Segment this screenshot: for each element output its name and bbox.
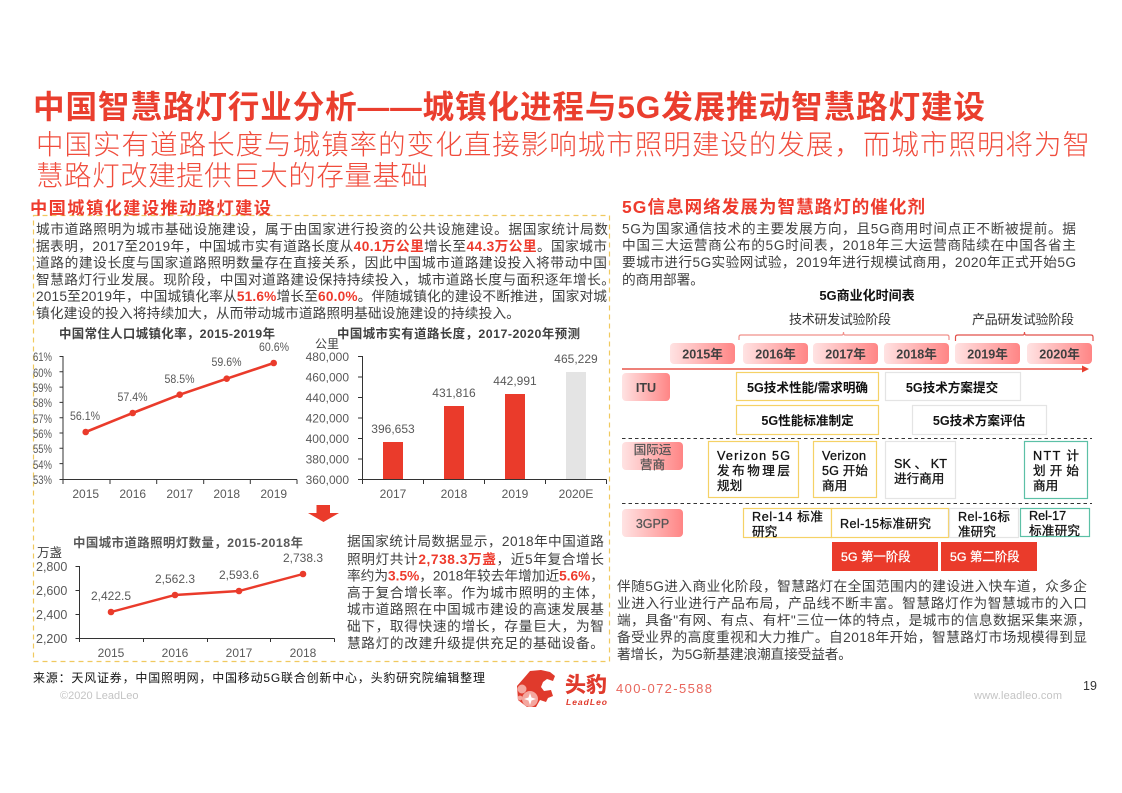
y labels: urbanization: 57%: [33, 412, 52, 426]
text block: street light commentary: [347, 533, 604, 651]
text block: street light commentary: 据国家统计局数据显示，2018年中国道路: [347, 533, 604, 549]
x labels: street lights: 2017: [226, 646, 253, 660]
x labels: street lights: 2018: [290, 646, 317, 660]
text block: 5G intro: 5G为国家通信技术的主要发展方向，且5G商用时间点正不断被提前。据: [622, 220, 1076, 236]
axes: road length: [358, 356, 606, 484]
box: Rel-17: Rel-17: [1029, 509, 1066, 523]
bracket: product trial: [956, 332, 1093, 341]
x labels: street lights: [98, 646, 317, 660]
chart: street lights line chart: [36, 535, 334, 660]
y labels: urbanization: 56%: [33, 427, 52, 441]
row label: 3GPP: [622, 509, 683, 537]
y labels: road length: 480,000: [306, 350, 349, 364]
x labels: urbanization: 2017: [166, 487, 193, 501]
box: SK KT: [886, 442, 956, 498]
divider: [622, 502, 1092, 504]
box: Rel-14: [744, 508, 832, 539]
y labels: road length: 440,000: [306, 391, 349, 405]
y labels: road length: 420,000: [306, 412, 349, 426]
box: tech proposal: 5G技术方案提交: [906, 380, 999, 395]
box: NTT: NTT 计: [1033, 449, 1079, 463]
chart title: street lights: 中国城市道路照明灯数量，2015-2018年: [73, 535, 303, 550]
row label: 3GPP: 3GPP: [636, 517, 669, 531]
logo: LeadLeo: [517, 670, 607, 707]
box: Rel-15: [832, 508, 948, 538]
copyright: ©2020 LeadLeo: [60, 690, 138, 702]
data labels: street lights: [91, 551, 323, 603]
bars: road length: [383, 372, 586, 479]
text block: 5G commercial stage: 业进入行业进行产品布局，产品线不断丰富。智慧路灯作为智慧城市的入口: [617, 595, 1087, 611]
box: Verizon commercial: 商用: [822, 479, 847, 493]
box: 5G phase one: 5G 第一阶段: [841, 549, 911, 564]
panel: left dashed frame: [34, 216, 610, 662]
box: tech proposal: [886, 372, 1020, 400]
y labels: street lights: 2,600: [36, 584, 67, 598]
data labels: urbanization: 60.6%: [259, 340, 289, 354]
chart: road length bar chart: [306, 326, 606, 501]
source note: 来源：天风证券，中国照明网，中国移动5G联合创新中心，头豹研究院编辑整理: [33, 670, 485, 685]
unit: street lights: 万盏: [37, 545, 62, 560]
y labels: urbanization: 55%: [33, 442, 52, 456]
box: SK KT: 进行商用: [894, 472, 944, 486]
data labels: street lights: 2,593.6: [219, 568, 259, 582]
heading: right section: 5G信息网络发展为智慧路灯的催化剂: [622, 197, 925, 217]
text block: 5G intro: 的商用部署。: [622, 272, 704, 288]
box: Verizon physical layer: Verizon 5G: [717, 449, 790, 463]
data line: street lights: [108, 571, 306, 615]
text block: left intro: [36, 221, 615, 321]
x labels: urbanization: 2019: [260, 487, 287, 501]
box: NTT: [1024, 442, 1088, 498]
subtitle: 中国实有道路长度与城镇率的变化直接影响城市照明建设的发展，而城市照明将为智: [36, 129, 1090, 160]
y labels: urbanization: [33, 350, 52, 487]
x labels: street lights: 2016: [162, 646, 189, 660]
arrow: timeline: [622, 366, 1089, 372]
text block: 5G commercial stage: 备受业界的高度重视和大力推广。自2018年开始，智慧路灯市场规模得到显: [617, 629, 1087, 645]
axes: street lights: [76, 566, 334, 642]
x labels: road length: [380, 487, 593, 501]
text block: street light commentary: 础下，取得快速的增长，存量巨大，为智: [347, 618, 604, 634]
row label: ITU: ITU: [636, 381, 656, 395]
x labels: road length: 2018: [441, 487, 468, 501]
year pills: 2020年: [1039, 346, 1080, 362]
box: Verizon physical layer: 发布物理层: [717, 463, 790, 478]
box: Verizon physical layer: [708, 442, 798, 498]
text block: left intro: 智慧路灯行业发展。现阶段，中国对道路建设保持持续投入，城市道路长度与面积逐年增长。: [36, 272, 615, 288]
box: performance standard: 5G性能标准制定: [761, 413, 854, 428]
year pills: 2016年: [755, 346, 796, 362]
unit: road length: 公里: [315, 337, 339, 351]
chart title: urbanization: 中国常住人口城镇化率，2015-2019年: [59, 326, 275, 341]
box: 5G phase two: 5G 第二阶段: [950, 549, 1020, 564]
text block: 5G intro: [622, 220, 1076, 288]
box: Rel-14: 研究: [752, 525, 778, 539]
x labels: urbanization: 2018: [213, 487, 240, 501]
y labels: road length: 380,000: [306, 452, 349, 466]
x labels: road length: 2020E: [559, 487, 593, 501]
text block: left intro: 2015至2019年，中国城镇化率从51.6%增长至60.0%。伴随城镇化的建设不断推进，国家对城: [36, 288, 607, 304]
data labels: road length: 396,653: [371, 422, 415, 436]
axes: urbanization: [60, 356, 297, 484]
data labels: road length: 431,816: [432, 386, 476, 400]
box: Rel-17: [1020, 508, 1090, 538]
y labels: urbanization: 59%: [33, 381, 52, 395]
data labels: street lights: 2,562.3: [155, 572, 195, 586]
year pills: 2018年: [896, 346, 937, 362]
page number: 19: [1083, 679, 1097, 693]
box: Rel-17: 标准研究: [1029, 524, 1080, 538]
y labels: urbanization: 54%: [33, 458, 52, 472]
row label: ITU: [622, 373, 670, 401]
box: Rel-16: [950, 508, 1018, 539]
text block: 5G intro: 要城市进行5G实验网试验，2019年进行规模试商用，2020年正式开始5G: [622, 254, 1076, 270]
box: tech evaluation: 5G技术方案评估: [933, 413, 1026, 428]
box: Verizon commercial: 5G 开始: [822, 464, 868, 478]
y labels: road length: 460,000: [306, 370, 349, 384]
text block: 5G commercial stage: 著增长，为5G新基建浪潮直接受益者。: [617, 646, 852, 662]
box: SK KT: SK 、 KT: [894, 457, 947, 471]
box: Rel-16: Rel-16标: [958, 510, 1010, 524]
data line: urbanization: [82, 360, 277, 435]
subtitle: 慧路灯改建提供巨大的存量基础: [36, 160, 428, 191]
y labels: urbanization: 58%: [33, 396, 52, 410]
y labels: street lights: 2,800: [36, 560, 67, 574]
data labels: road length: 442,991: [493, 374, 537, 388]
box: 5G phase two: [941, 542, 1037, 571]
x labels: urbanization: 2015: [72, 487, 99, 501]
logo text: latin: LeadLeo: [566, 697, 607, 707]
x labels: road length: 2017: [380, 487, 407, 501]
chart title: road length: 中国城市实有道路长度，2017-2020年预测: [337, 326, 580, 341]
timeline title: 5G商业化时间表: [819, 288, 915, 303]
box: NTT: 划开始: [1033, 464, 1079, 478]
y labels: street lights: [36, 560, 67, 646]
box: 5G phase one: [832, 542, 938, 571]
data labels: road length: [371, 352, 598, 436]
divider: [622, 438, 1092, 440]
y labels: urbanization: 61%: [33, 350, 52, 364]
row label: operators: 营商: [640, 458, 665, 472]
subtitle: [36, 129, 1090, 191]
phase label: tech trial: 技术研发试验阶段: [789, 312, 891, 327]
phase label: product trial: 产品研发试验阶段: [972, 312, 1074, 327]
data labels: urbanization: 56.1%: [70, 409, 100, 423]
data labels: urbanization: 57.4%: [118, 390, 148, 404]
text block: 5G intro: 中国三大运营商公布的5G时间表，2018年三大运营商陆续在中国各省主: [622, 238, 1076, 253]
y labels: road length: 360,000: [306, 473, 349, 487]
y labels: urbanization: 53%: [33, 473, 52, 487]
website: www.leadleo.com: [973, 690, 1062, 702]
text block: street light commentary: 城市道路照在中国城市建设的高速发展基: [347, 601, 604, 617]
year pills: 2019年: [967, 346, 1008, 362]
year pills: [670, 343, 1092, 364]
y labels: street lights: 2,400: [36, 608, 67, 622]
chart: urbanization rate line chart: [33, 326, 297, 501]
y labels: urbanization: 60%: [33, 366, 52, 380]
text block: left intro: 城市道路照明为城市基础设施建设，属于由国家进行投资的公共设施建设。据国家统计局数: [36, 221, 608, 237]
x labels: urbanization: [72, 487, 287, 501]
title: 中国智慧路灯行业分析——城镇化进程与5G发展推动智慧路灯建设: [33, 89, 985, 125]
text block: street light commentary: 慧路灯的改建升级提供充足的基础设备。: [347, 635, 604, 651]
box: Rel-15: Rel-15标准研究: [840, 517, 931, 531]
data labels: street lights: 2,738.3: [283, 551, 323, 565]
text block: street light commentary: 照明灯共计2,738.3万盏，近5年复合增长: [347, 551, 604, 567]
text block: street light commentary: 率约为3.5%，2018年较去年增加近5.6%，: [347, 568, 604, 584]
data labels: urbanization: 58.5%: [164, 372, 195, 386]
box: tech performance: [736, 372, 878, 400]
row label: operators: 国际运: [634, 443, 672, 457]
box: performance standard: [736, 406, 878, 434]
box: Verizon commercial: [814, 442, 876, 498]
bracket: tech trial: [739, 332, 949, 340]
icon: leopard head: [517, 670, 555, 707]
text block: 5G commercial stage: 端，具备"有网、有点、有杆"三位一体的特点，是城市的信息数据采集来源，: [617, 612, 1091, 628]
year pills: 2015年: [682, 346, 723, 362]
box: Verizon commercial: Verizon: [822, 449, 866, 463]
data labels: road length: 465,229: [554, 352, 598, 366]
text block: left intro: 镇化建设的投入将持续加大，从而带动城市道路照明基础设施建设的持续投入。: [36, 305, 520, 321]
box: Verizon physical layer: 规划: [717, 478, 742, 493]
y labels: road length: [306, 350, 349, 487]
y labels: road length: 400,000: [306, 432, 349, 446]
year pills: 2017年: [825, 346, 866, 362]
x labels: road length: 2019: [502, 487, 529, 501]
text block: street light commentary: 高于复合增长率。作为城市照明的主体，: [347, 584, 604, 600]
arrow: down: [308, 505, 339, 522]
data labels: urbanization: 59.6%: [212, 355, 242, 369]
heading: left section: 中国城镇化建设推动路灯建设: [30, 198, 271, 218]
box: Rel-16: 准研究: [958, 525, 996, 539]
phone number: 400-072-5588: [616, 681, 712, 696]
text block: 5G commercial stage: [617, 578, 1091, 662]
timeline diagram: [622, 288, 1093, 571]
box: Rel-14: Rel-14 标准: [752, 510, 823, 524]
text block: left intro: 道路的建设长度与国家道路照明数量存在直接关系，因此中国城市道路建设投入将带动中国: [36, 254, 607, 270]
x labels: urbanization: 2016: [119, 487, 146, 501]
text block: 5G commercial stage: 伴随5G进入商业化阶段，智慧路灯在全国范围内的建设进入快车道，众多企: [617, 578, 1087, 594]
text block: left intro: 据表明，2017至2019年，中国城市实有道路长度从40.1万公里增长至44.3万公里。国家城市: [36, 238, 607, 254]
data labels: street lights: 2,422.5: [91, 589, 131, 603]
logo text: chinese: 头豹: [565, 674, 607, 697]
box: tech evaluation: [912, 406, 1046, 434]
y labels: street lights: 2,200: [36, 632, 67, 646]
data labels: urbanization: [70, 340, 289, 423]
row label: operators: [622, 442, 683, 472]
box: tech performance: 5G技术性能/需求明确: [747, 380, 868, 395]
x labels: street lights: 2015: [98, 646, 125, 660]
box: NTT: 商用: [1033, 479, 1058, 493]
